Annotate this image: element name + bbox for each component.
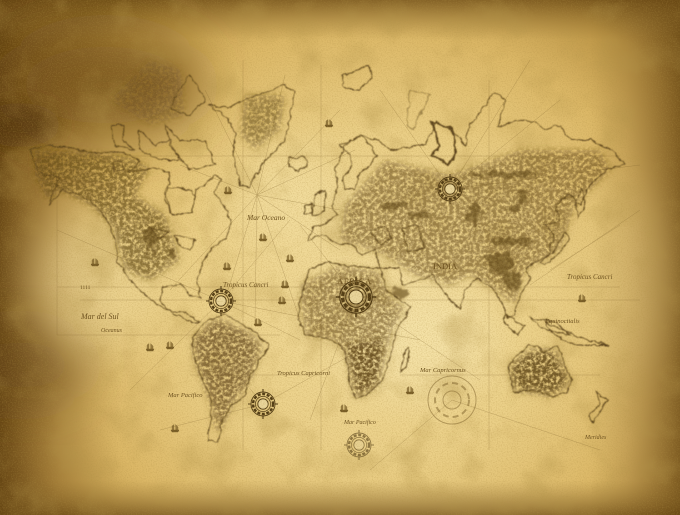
interior marks asia bbox=[380, 170, 538, 301]
continent shading bbox=[35, 60, 610, 435]
faint compass: indian ocean bbox=[428, 376, 476, 424]
greenland bbox=[208, 85, 295, 187]
compass rose: africa bbox=[336, 277, 376, 317]
arctic islands bbox=[110, 75, 215, 170]
map labels: Tropicus Cancri bbox=[223, 281, 268, 289]
great lakes bbox=[150, 228, 195, 250]
map labels: Equinoctialis bbox=[544, 318, 580, 325]
hudson bay bbox=[165, 188, 195, 215]
map labels: Mar Pacifico bbox=[167, 392, 203, 399]
ships bbox=[91, 120, 586, 432]
small north american island bbox=[113, 160, 124, 172]
map labels: Tropicus Cancri bbox=[567, 273, 612, 281]
novaya zemlya bbox=[407, 90, 430, 130]
japan bbox=[540, 232, 570, 265]
chart grid and rhumb lines bbox=[57, 60, 640, 470]
map labels: AFRICA bbox=[337, 276, 372, 286]
continent outlines bbox=[30, 66, 625, 442]
map labels: Oceanus bbox=[101, 328, 123, 334]
map labels: Mar del Sul bbox=[80, 312, 120, 321]
compass rose: caribbean bbox=[206, 286, 236, 316]
africa bbox=[298, 262, 412, 398]
map labels: Mar Oceano bbox=[246, 213, 285, 222]
map labels: Meridies bbox=[584, 435, 607, 441]
eurasia bbox=[308, 92, 625, 318]
terrain drawings bbox=[142, 170, 538, 301]
kamchatka area bbox=[576, 187, 585, 218]
new zealand bbox=[590, 392, 608, 422]
compass rose: central asia bbox=[435, 174, 465, 204]
trees bbox=[142, 228, 176, 258]
inland seas bbox=[370, 226, 425, 252]
iceland bbox=[288, 157, 308, 171]
map labels: INDIA bbox=[433, 261, 458, 271]
dark arctic gulf bbox=[432, 122, 456, 165]
british isles bbox=[305, 190, 325, 216]
compass rose: south atlantic bbox=[248, 389, 278, 419]
svalbard bbox=[342, 66, 372, 90]
map labels: Tropicus Capricorni bbox=[277, 370, 330, 377]
south america bbox=[192, 315, 268, 442]
map labels: Mar Pacifico bbox=[343, 419, 376, 426]
map labels: Mar Capricornus bbox=[419, 367, 466, 374]
indonesian islands bbox=[505, 315, 610, 345]
compass rose: south of africa bbox=[344, 430, 374, 460]
map labels: 1111 bbox=[80, 285, 91, 291]
madagascar bbox=[401, 348, 410, 372]
scandinavia bbox=[340, 136, 378, 190]
australia bbox=[508, 345, 572, 397]
map labels bbox=[80, 213, 612, 441]
north america bbox=[30, 145, 232, 322]
